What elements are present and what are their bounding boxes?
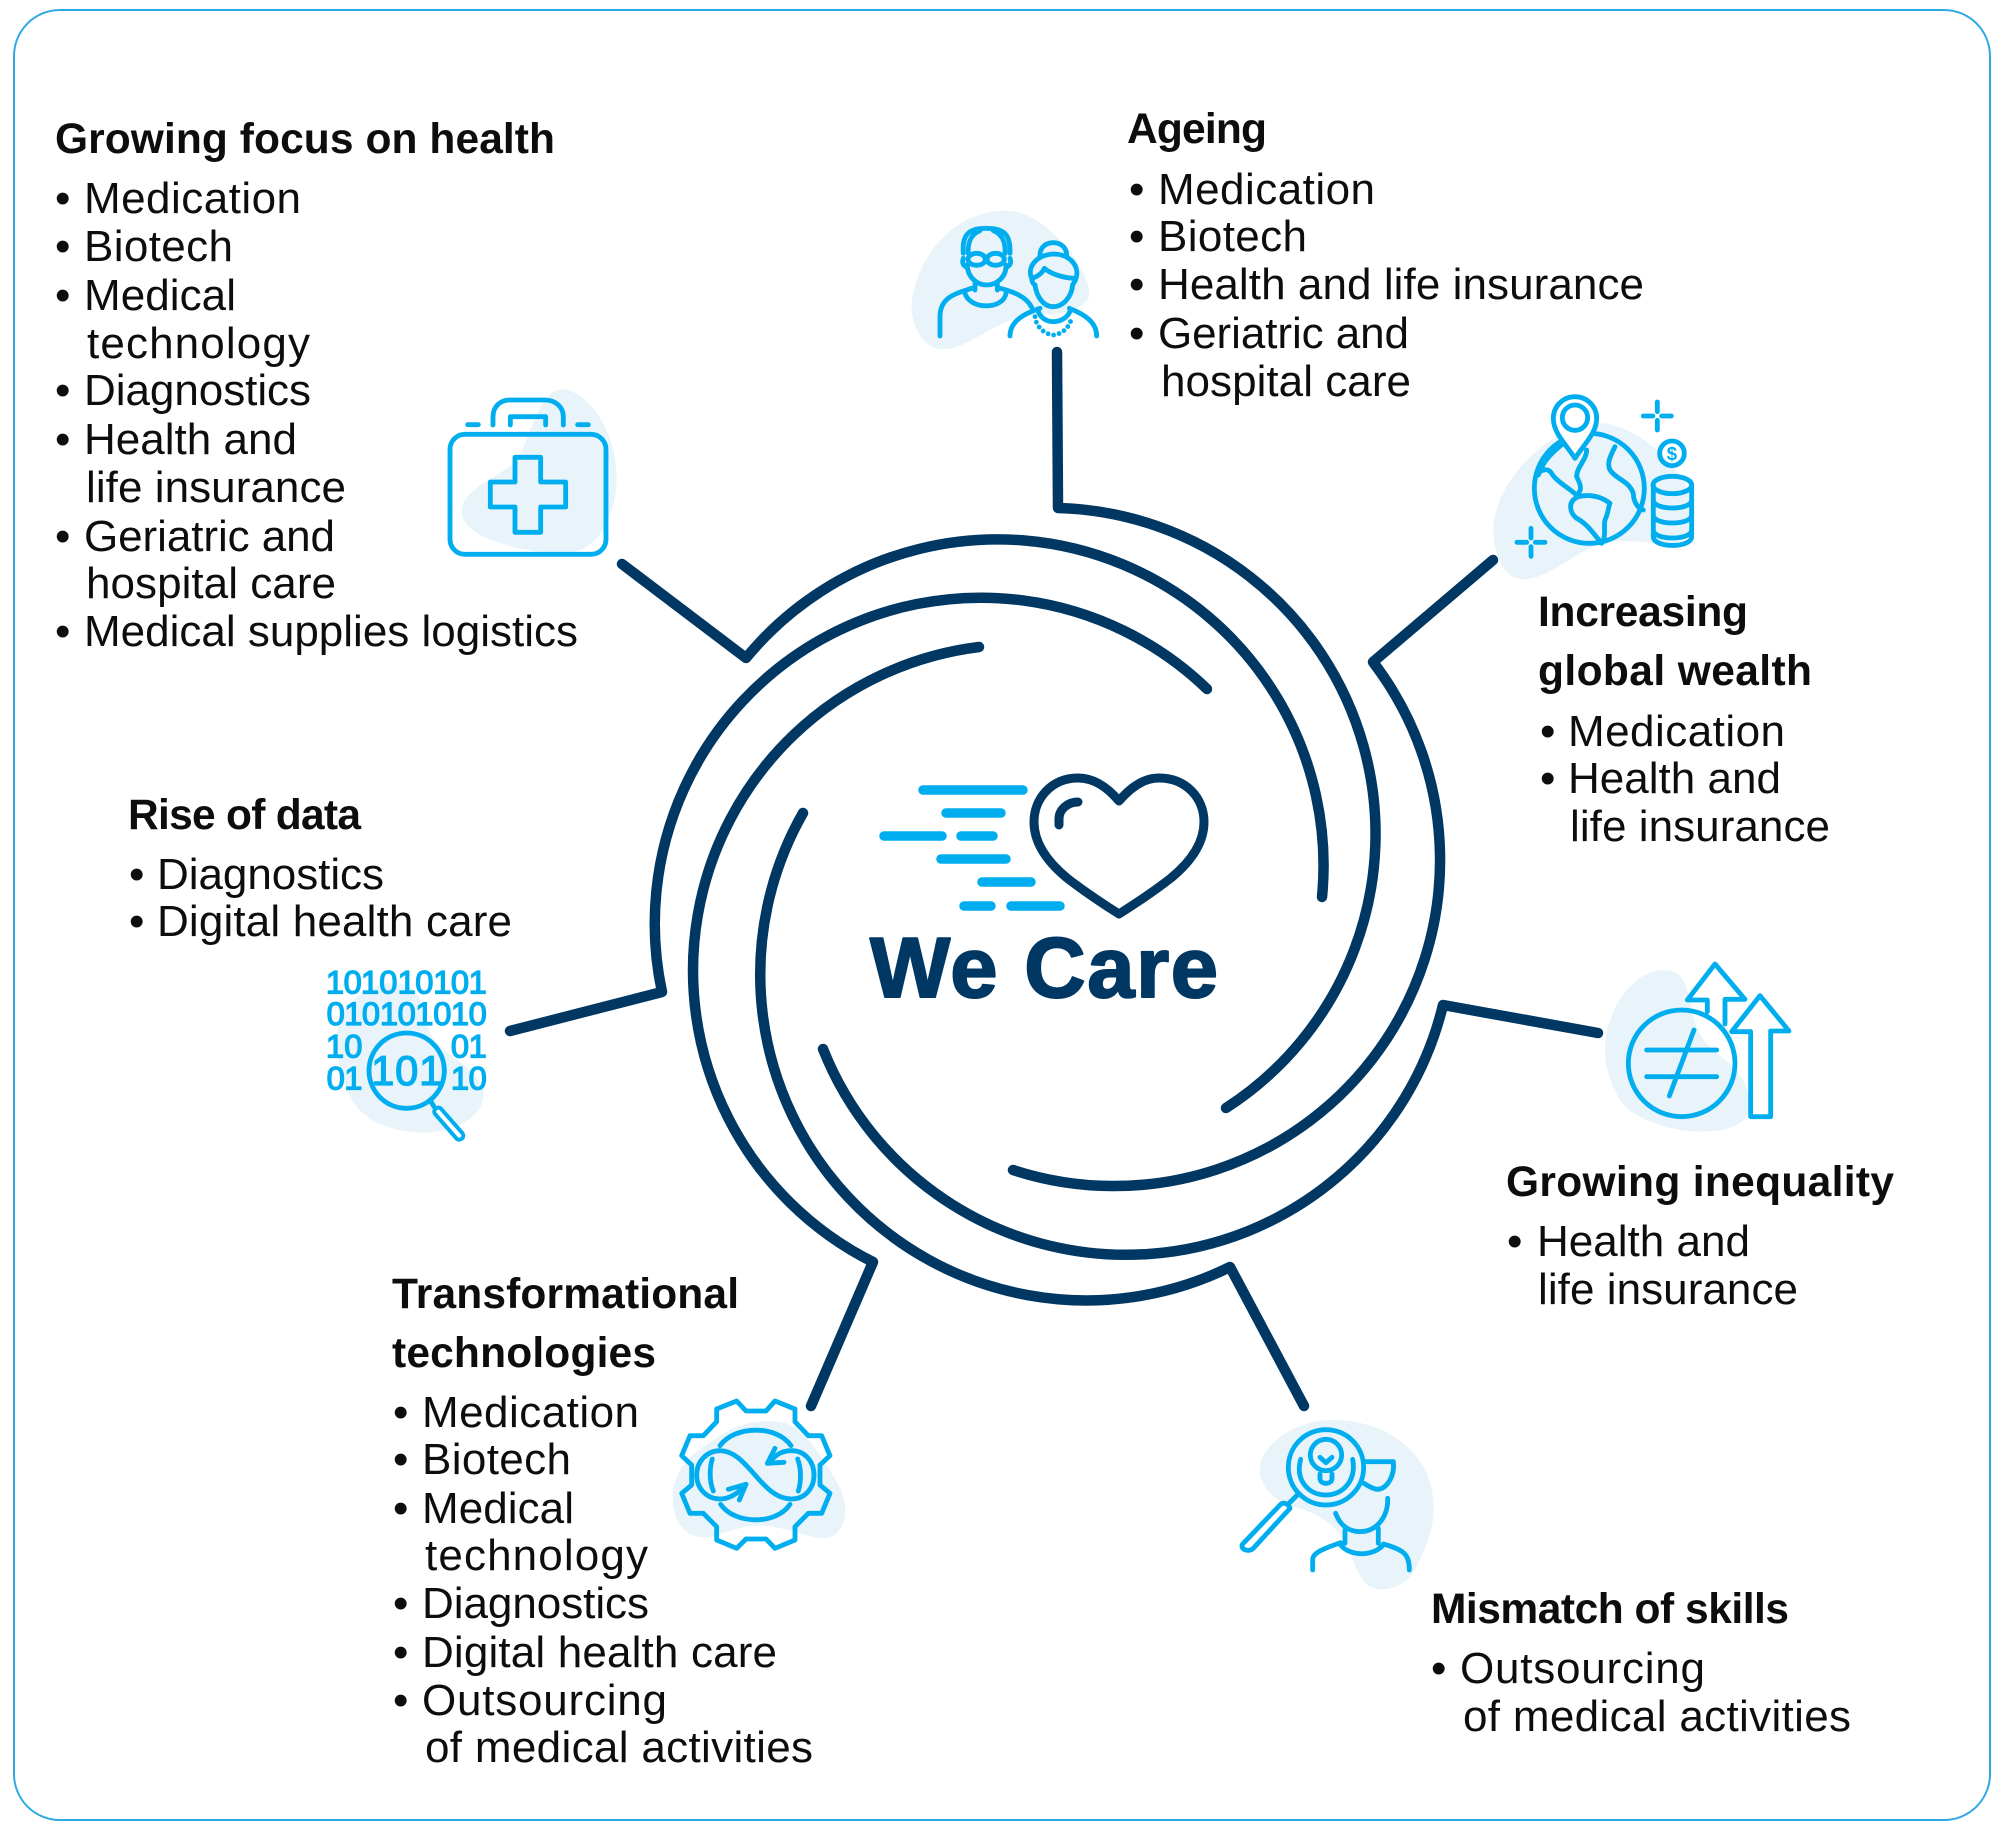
list (1431, 1644, 1851, 1741)
icon: inequality sign and arrows (1605, 964, 1789, 1132)
spiral arm: growing inequality (823, 1005, 1598, 1255)
icon: first aid kit (450, 389, 617, 554)
list: technology (425, 1531, 648, 1580)
list (1540, 707, 1830, 851)
icon: binary data with magnifier: 10 (451, 1059, 487, 1096)
list: Diagnostics (84, 366, 311, 415)
heading: Rise of data (128, 792, 361, 839)
list: • (393, 1484, 408, 1533)
spiral arm: transformational technologies (693, 647, 979, 1406)
list: Outsourcing (422, 1676, 667, 1725)
list: Health and life insurance (1158, 260, 1644, 309)
logo wordmark: We Care (870, 921, 1218, 1016)
icon: binary data with magnifier: 101010101 (326, 963, 487, 1000)
list: • (55, 174, 70, 223)
icon: speed lines (884, 790, 1060, 906)
list: Biotech (422, 1435, 571, 1484)
icon: gear with infinity loop (673, 1401, 845, 1548)
icon: binary data with magnifier: 01 (327, 1059, 362, 1096)
list: of medical activities (425, 1723, 813, 1772)
list: Diagnostics (422, 1579, 649, 1628)
panel: transformational technologies (392, 1271, 813, 1772)
list: life insurance (1570, 802, 1830, 851)
list: • (1129, 165, 1144, 214)
list: • (393, 1579, 408, 1628)
list (1129, 165, 1644, 406)
spiral arm: ageing (1057, 352, 1376, 1108)
list: Health and (1568, 754, 1781, 803)
logo: We Care (870, 778, 1218, 1016)
heading: Transformational (392, 1271, 739, 1318)
list: • (55, 271, 70, 320)
list: hospital care (1161, 357, 1411, 406)
list (1507, 1217, 1798, 1314)
list: • (393, 1435, 408, 1484)
list: hospital care (86, 559, 336, 608)
panel: mismatch of skills (1431, 1586, 1851, 1741)
list: Diagnostics (157, 850, 384, 899)
list: Medical supplies logistics (84, 607, 578, 656)
panel: ageing (1127, 106, 1644, 406)
heading: Growing inequality (1506, 1159, 1894, 1206)
icon: globe, pin and coins (1493, 397, 1693, 579)
panel: growing focus on health (55, 116, 578, 656)
heading: Increasing (1538, 589, 1748, 636)
list: Health and (84, 415, 297, 464)
list: Biotech (84, 222, 233, 271)
list: Geriatric and (84, 512, 335, 561)
list: • (55, 366, 70, 415)
icon: elderly couple (912, 211, 1097, 349)
list: • (129, 850, 144, 899)
list: Health and (1537, 1217, 1750, 1266)
panel: increasing global wealth (1538, 589, 1830, 851)
panel: rise of data (128, 792, 512, 946)
list: • (1507, 1217, 1522, 1266)
heading: Mismatch of skills (1431, 1586, 1789, 1633)
list: Medication (1568, 707, 1785, 756)
list: Medical (422, 1484, 574, 1533)
icon: person with magnifier (1242, 1420, 1434, 1589)
list: Digital health care (157, 897, 512, 946)
panel: growing inequality (1506, 1159, 1894, 1314)
heading: Growing focus on health (55, 116, 555, 163)
icon: heart (1034, 778, 1204, 914)
list: • (55, 415, 70, 464)
list: Medical (84, 271, 236, 320)
list: • (393, 1388, 408, 1437)
icon: globe, pin and coins: $ (1667, 443, 1678, 464)
icon: binary data with magnifier: 10 (326, 1027, 362, 1064)
list (393, 1388, 813, 1772)
list: life insurance (86, 463, 346, 512)
list: • (1129, 309, 1144, 358)
list (129, 850, 512, 946)
icon: binary data with magnifier (326, 963, 487, 1136)
list: • (129, 897, 144, 946)
spiral arm: increasing global wealth (1013, 560, 1493, 1186)
list: • (1431, 1644, 1446, 1693)
list: Medication (1158, 165, 1375, 214)
list: Medication (84, 174, 301, 223)
list: • (1540, 754, 1555, 803)
list: Digital health care (422, 1628, 777, 1677)
list: Outsourcing (1460, 1644, 1705, 1693)
list: • (55, 222, 70, 271)
list: of medical activities (1463, 1692, 1851, 1741)
spiral arm: mismatch of skills (760, 813, 1304, 1406)
heading: Ageing (1127, 106, 1267, 153)
list: Biotech (1158, 212, 1307, 261)
list: • (55, 607, 70, 656)
list: • (393, 1628, 408, 1677)
spiral arm: rise of data (510, 598, 1207, 1031)
panel: increasing global wealth: global wealth (1538, 648, 1812, 695)
list: • (55, 512, 70, 561)
central spiral diagram (510, 352, 1598, 1406)
list (55, 174, 578, 656)
icon: binary data with magnifier: 101 (371, 1047, 442, 1094)
spiral arm: growing focus on health (622, 539, 1324, 897)
list: technology (87, 319, 310, 368)
list: Medication (422, 1388, 639, 1437)
icon: binary data with magnifier: 010101010 (327, 995, 487, 1032)
list: life insurance (1538, 1265, 1798, 1314)
list: Geriatric and (1158, 309, 1409, 358)
list: • (393, 1676, 408, 1725)
list: • (1540, 707, 1555, 756)
panel: transformational technologies: technologies (392, 1330, 656, 1377)
list: • (1129, 260, 1144, 309)
icon: binary data with magnifier: 01 (451, 1027, 487, 1064)
list: • (1129, 212, 1144, 261)
